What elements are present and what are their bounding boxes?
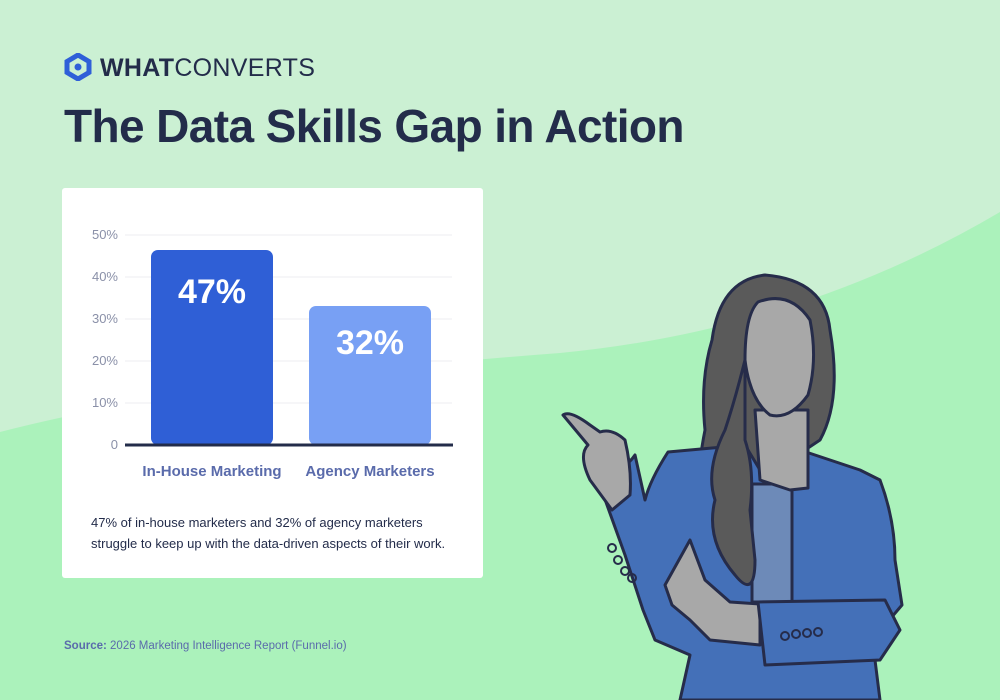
hair back — [698, 275, 834, 600]
source: Source: 2026 Marketing Intelligence Report (Funnel.io) — [64, 640, 347, 652]
shirt — [752, 484, 792, 602]
title: The Data Skills Gap in Action — [64, 100, 684, 152]
bar chart: 0 — [111, 437, 118, 452]
bar chart: 30% — [92, 311, 118, 326]
jacket — [598, 445, 902, 700]
bar chart: Agency Marketers — [305, 463, 435, 480]
lower hand — [665, 540, 760, 645]
bar chart: In-House Marketing — [142, 463, 282, 480]
logo: WHATCONVERTS — [100, 54, 315, 82]
raised hand — [563, 414, 630, 510]
bar chart: 20% — [92, 353, 118, 368]
caption: 47% of in-house marketers and 32% of agency marketers struggle to keep up with the data-driven aspects of their work. — [91, 515, 445, 551]
icon: logo hexagon — [64, 53, 92, 81]
hair front strand — [712, 360, 755, 585]
bar chart: 10% — [92, 395, 118, 410]
face — [745, 299, 814, 416]
bar chart: 32% — [336, 324, 404, 362]
bar chart: 40% — [92, 269, 118, 284]
crossed forearm — [758, 600, 900, 665]
bar chart — [92, 227, 453, 480]
bar chart: 50% — [92, 227, 118, 242]
panel: chart card — [62, 188, 483, 578]
bar chart: 47% — [178, 273, 246, 311]
neck — [755, 410, 808, 490]
